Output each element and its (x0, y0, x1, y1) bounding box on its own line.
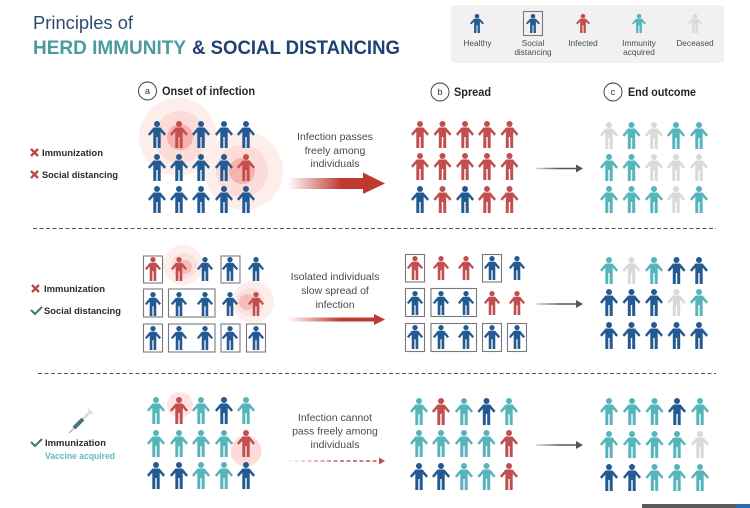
legend (451, 5, 724, 63)
row 1 labels (31, 148, 118, 181)
title: Principles of (33, 12, 134, 33)
heading: onset of infection: a (145, 86, 150, 96)
heading: spread (431, 83, 491, 101)
heading: end outcome: c (611, 87, 616, 97)
row 2 caption (291, 271, 379, 311)
heading: spread: Spread (454, 87, 491, 99)
row 3 caption: Infection cannot (298, 412, 372, 424)
legend: Healthy (463, 38, 492, 48)
title (33, 12, 400, 59)
row 3 labels: Vaccine acquired (45, 451, 115, 462)
title: HERD IMMUNITY (33, 37, 186, 59)
row 1 caption (297, 131, 373, 170)
heading: end outcome: End outcome (628, 87, 696, 99)
row 3 infection halos (167, 392, 262, 466)
row 1 caption: freely among (305, 145, 366, 157)
heading: onset of infection (138, 82, 255, 100)
legend: Immunity (622, 38, 657, 48)
row 2 caption: Isolated individuals (291, 271, 379, 283)
row 1 caption: individuals (310, 158, 360, 170)
bottom corner bar (642, 504, 750, 508)
heading: spread: b (437, 87, 443, 97)
heading: end outcome (604, 83, 696, 101)
legend: Deceased (676, 38, 714, 48)
row 2 outcome people (600, 257, 708, 349)
row 1 outcome people (600, 122, 708, 213)
row 3 labels: Immunization (45, 438, 106, 449)
heading: onset of infection: Onset of infection (162, 86, 255, 98)
row 1 onset people (148, 121, 255, 213)
row 2 labels: Social distancing (44, 306, 121, 317)
legend: distancing (514, 47, 552, 57)
row 3 onset people (147, 397, 255, 489)
row 2 onset people and isolation boxes (144, 256, 266, 352)
row 1 small arrow (536, 164, 583, 172)
title: & SOCIAL DISTANCING (192, 37, 400, 59)
row 3 outcome people (600, 398, 709, 491)
row 3 spread people (410, 398, 518, 490)
row 2 spread people and isolation boxes (406, 254, 526, 352)
row 3 caption (292, 412, 378, 451)
row 1 spread people (411, 121, 518, 213)
row 2 infection halos (163, 245, 274, 323)
row 2 caption: infection (315, 299, 355, 311)
icon: syringe (69, 409, 93, 433)
row 1 labels: Social distancing (42, 170, 118, 181)
row 2 medium arrow (287, 314, 385, 325)
row 1 thick arrow (288, 172, 385, 194)
row 3 caption: pass freely among (292, 426, 378, 438)
legend: acquired (623, 47, 655, 57)
row 1 labels: Immunization (42, 148, 103, 159)
row 3 small arrow (536, 441, 583, 449)
row 1 caption: Infection passes (297, 131, 373, 143)
legend: Infected (568, 38, 598, 48)
row 2 small arrow (536, 300, 583, 308)
legend: Social (522, 38, 544, 48)
row 2 caption: slow spread of (301, 285, 369, 297)
row 3 dashed arrow (288, 458, 385, 464)
row 2 labels: Immunization (44, 284, 105, 295)
row 2 labels (31, 284, 121, 317)
row 1 infection halos (139, 98, 283, 210)
row 3 caption: individuals (310, 439, 360, 451)
row 3 labels (31, 438, 115, 462)
